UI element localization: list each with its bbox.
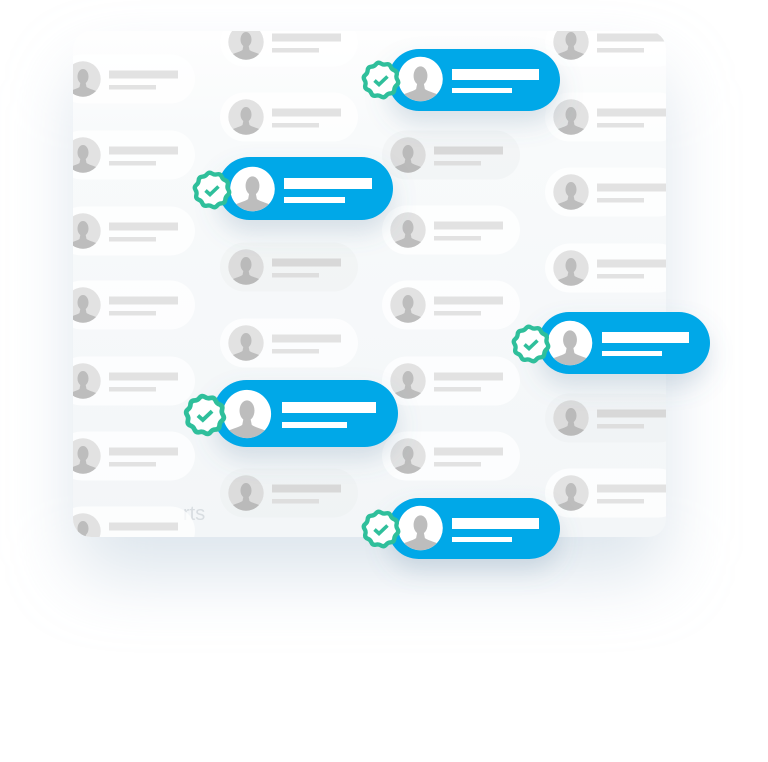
verified card 1 <box>364 49 560 111</box>
panel: list background <box>73 31 666 537</box>
verified card 2 <box>195 157 393 220</box>
icon: check badge <box>364 63 398 97</box>
icon: check badge <box>364 512 398 546</box>
icon: check badge <box>195 173 229 207</box>
list column 4 <box>545 31 666 518</box>
list column 2 <box>228 31 341 511</box>
list column 3 <box>382 130 520 480</box>
verified card 3 <box>514 312 710 374</box>
verified card 5 <box>364 498 560 559</box>
illustration: verified profiles among a list of profiles <box>51 31 718 599</box>
list column 1 <box>73 61 195 537</box>
verified card 4 <box>186 380 398 447</box>
icon: check badge <box>514 327 548 361</box>
icon: check badge <box>186 396 224 434</box>
panel shadow <box>75 70 665 575</box>
faded heading fragment: rts <box>183 503 205 525</box>
